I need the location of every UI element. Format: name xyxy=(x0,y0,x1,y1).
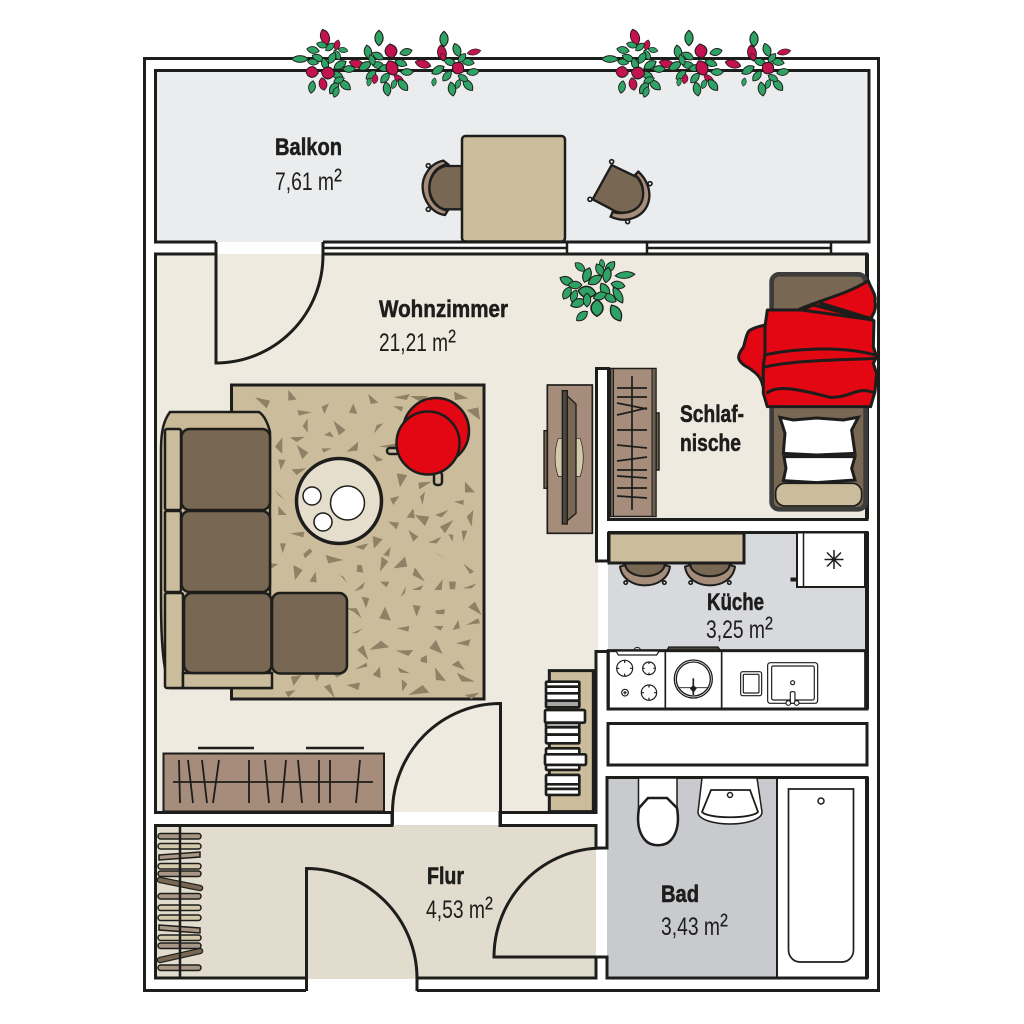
balcony table xyxy=(462,136,565,242)
door: balcony xyxy=(216,242,323,363)
label: Bad: Bad xyxy=(661,881,699,908)
door: living room to hallway xyxy=(392,704,500,825)
label: Wohnzimmer xyxy=(379,296,508,358)
label: Küche: Küche xyxy=(707,589,764,616)
balcony plants right xyxy=(602,28,791,98)
wash basin xyxy=(698,778,762,824)
sofa xyxy=(161,412,347,688)
kitchen counter xyxy=(608,647,866,709)
label: Bad: 3,43 m² xyxy=(661,907,728,942)
stove xyxy=(616,647,659,700)
indoor plant xyxy=(558,259,635,323)
balcony plants left xyxy=(292,28,481,98)
label: Wohnzimmer: 21,21 m² xyxy=(379,323,456,358)
coat rack xyxy=(158,825,201,978)
fridge xyxy=(791,532,865,587)
sink xyxy=(741,663,818,705)
label: Balkon xyxy=(275,134,342,197)
bed: red blanket xyxy=(739,281,877,407)
label: Schlafnische: Schlaf- xyxy=(680,401,744,428)
bed: bolster xyxy=(776,483,862,506)
label: Schlafnische: nische xyxy=(680,430,741,457)
rug pattern xyxy=(255,390,482,699)
bed: pillows xyxy=(780,417,858,483)
toilet xyxy=(638,778,678,845)
floor: balcony xyxy=(156,71,869,242)
balcony chair right xyxy=(588,160,652,224)
balcony chair left xyxy=(423,161,462,215)
bookshelf xyxy=(545,671,593,812)
books xyxy=(545,682,586,795)
walls xyxy=(144,58,878,990)
floor: hallway xyxy=(156,825,596,979)
rug xyxy=(232,385,484,699)
floor: bathroom xyxy=(607,777,777,978)
label: Balkon: Balkon xyxy=(275,134,342,161)
label: Flur xyxy=(426,863,493,925)
coffee table xyxy=(296,458,382,544)
door: bathroom xyxy=(494,848,603,957)
label: Küche: 3,25 m² xyxy=(706,610,773,645)
washing machine xyxy=(667,647,720,698)
kitchen table xyxy=(609,533,744,585)
label: Bad xyxy=(661,881,728,942)
label: Flur: 4,53 m² xyxy=(426,890,493,925)
floor: living room and sleeping niche xyxy=(156,254,867,812)
bed xyxy=(739,274,877,509)
bathtub xyxy=(788,789,854,962)
tv unit xyxy=(544,385,592,533)
floor: kitchen xyxy=(608,532,867,651)
label: Balkon: 7,61 m² xyxy=(275,162,342,197)
door: entrance xyxy=(306,868,417,991)
label: Schlafnische xyxy=(680,401,744,457)
label: Küche xyxy=(706,589,773,645)
kitchen chairs xyxy=(620,563,735,585)
red armchair xyxy=(387,398,469,485)
label: Wohnzimmer: Wohnzimmer xyxy=(379,296,508,323)
low cabinet xyxy=(164,748,384,812)
wardrobe xyxy=(610,368,659,516)
label: Flur: Flur xyxy=(427,863,464,890)
